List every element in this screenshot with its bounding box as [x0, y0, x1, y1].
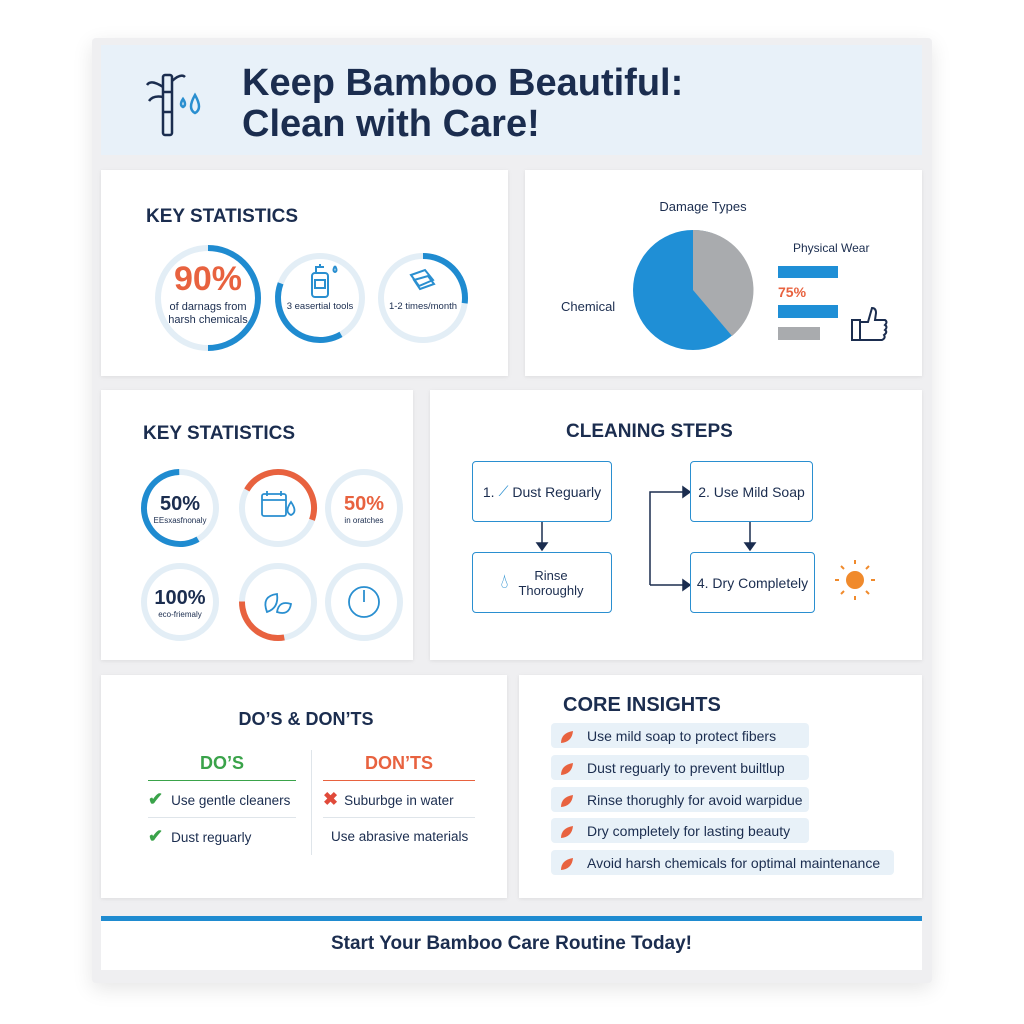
panel: core insights — [519, 675, 922, 898]
do column: ✔ Dust reguarly — [148, 826, 251, 846]
flow arrows — [536, 486, 875, 600]
text: Use mild soap to protect fibers — [587, 728, 776, 744]
dont column: DON’TS — [365, 753, 433, 773]
panel: damage types pie — [525, 170, 922, 376]
footer call to action — [101, 921, 922, 970]
heading: CORE INSIGHTS — [563, 694, 721, 716]
title — [242, 62, 683, 145]
pie chart: Damage Types — [659, 199, 747, 214]
stat rings grid: 50% — [160, 493, 200, 515]
do column: ✔ Use gentle cleaners — [148, 789, 290, 809]
header — [101, 45, 922, 155]
step: rinse: Thoroughly — [518, 582, 584, 598]
pie chart: Chemical — [561, 299, 615, 314]
step: rinse: 💧︎ — [500, 571, 508, 593]
text: Rinse thorughly for avoid warpidue — [587, 792, 803, 808]
step: dust: 1. Dust Reguarly — [483, 484, 601, 500]
stat rings grid: in oratches — [344, 516, 384, 525]
step: dust: ⟋ — [499, 483, 508, 499]
do column: DO’S — [200, 753, 244, 773]
footer call to action: Start Your Bamboo Care Routine Today! — [331, 933, 692, 954]
stat rings grid: 50% — [344, 493, 384, 515]
stat rings grid: 100% — [154, 587, 206, 609]
footer bar — [101, 916, 922, 921]
heading: CLEANING STEPS — [566, 421, 733, 442]
heading: KEY STATISTICS — [146, 206, 298, 227]
step: rinse — [472, 552, 612, 613]
background container — [92, 38, 932, 983]
step: rinse: Rinse — [534, 568, 568, 582]
panel: cleaning steps — [430, 390, 922, 660]
text: Dust reguarly to prevent builtlup — [587, 760, 785, 776]
panel: dos and donts — [101, 675, 507, 898]
step: dust — [472, 461, 612, 522]
stat rings grid: EEsxasfnonaly — [154, 516, 206, 525]
icon: sun — [835, 560, 875, 600]
pie chart: 75% — [778, 284, 807, 300]
stat rings: harsh chemicals — [168, 314, 248, 326]
stat rings grid: eco-friemaly — [158, 610, 202, 619]
text: Avoid harsh chemicals for optimal maintenance — [587, 854, 880, 870]
stat rings: of darnags from — [169, 301, 247, 313]
stat rings grid — [141, 469, 403, 641]
panel: key statistics 2 — [101, 390, 413, 660]
step: dry: 4. Dry Completely — [697, 574, 808, 590]
title: Keep Bamboo Beautiful: — [242, 62, 683, 104]
title: Clean with Care! — [242, 103, 540, 145]
pie chart — [561, 199, 888, 350]
dont column: Use abrasive materials — [331, 829, 468, 844]
stat rings: 1-2 times/month — [389, 301, 457, 312]
heading: KEY STATISTICS — [143, 423, 295, 444]
icon: bamboo with drop — [146, 74, 200, 136]
stat rings: 90% — [174, 260, 242, 298]
dont column — [323, 753, 475, 844]
dont column: ✖ Suburbge in water — [323, 789, 454, 809]
step: mild soap: 2. Use Mild Soap — [698, 484, 805, 500]
heading: DO’S & DON’TS — [238, 709, 374, 729]
step: mild soap — [690, 461, 813, 522]
text: Dry completely for lasting beauty — [587, 822, 790, 838]
pie chart: Physical Wear — [793, 241, 869, 255]
do column — [148, 753, 296, 846]
stat rings — [155, 245, 468, 351]
step: dry — [690, 552, 815, 613]
panel: key statistics 1 — [101, 170, 508, 376]
insight list — [551, 723, 894, 875]
stat rings: 3 easertial tools — [287, 301, 354, 312]
